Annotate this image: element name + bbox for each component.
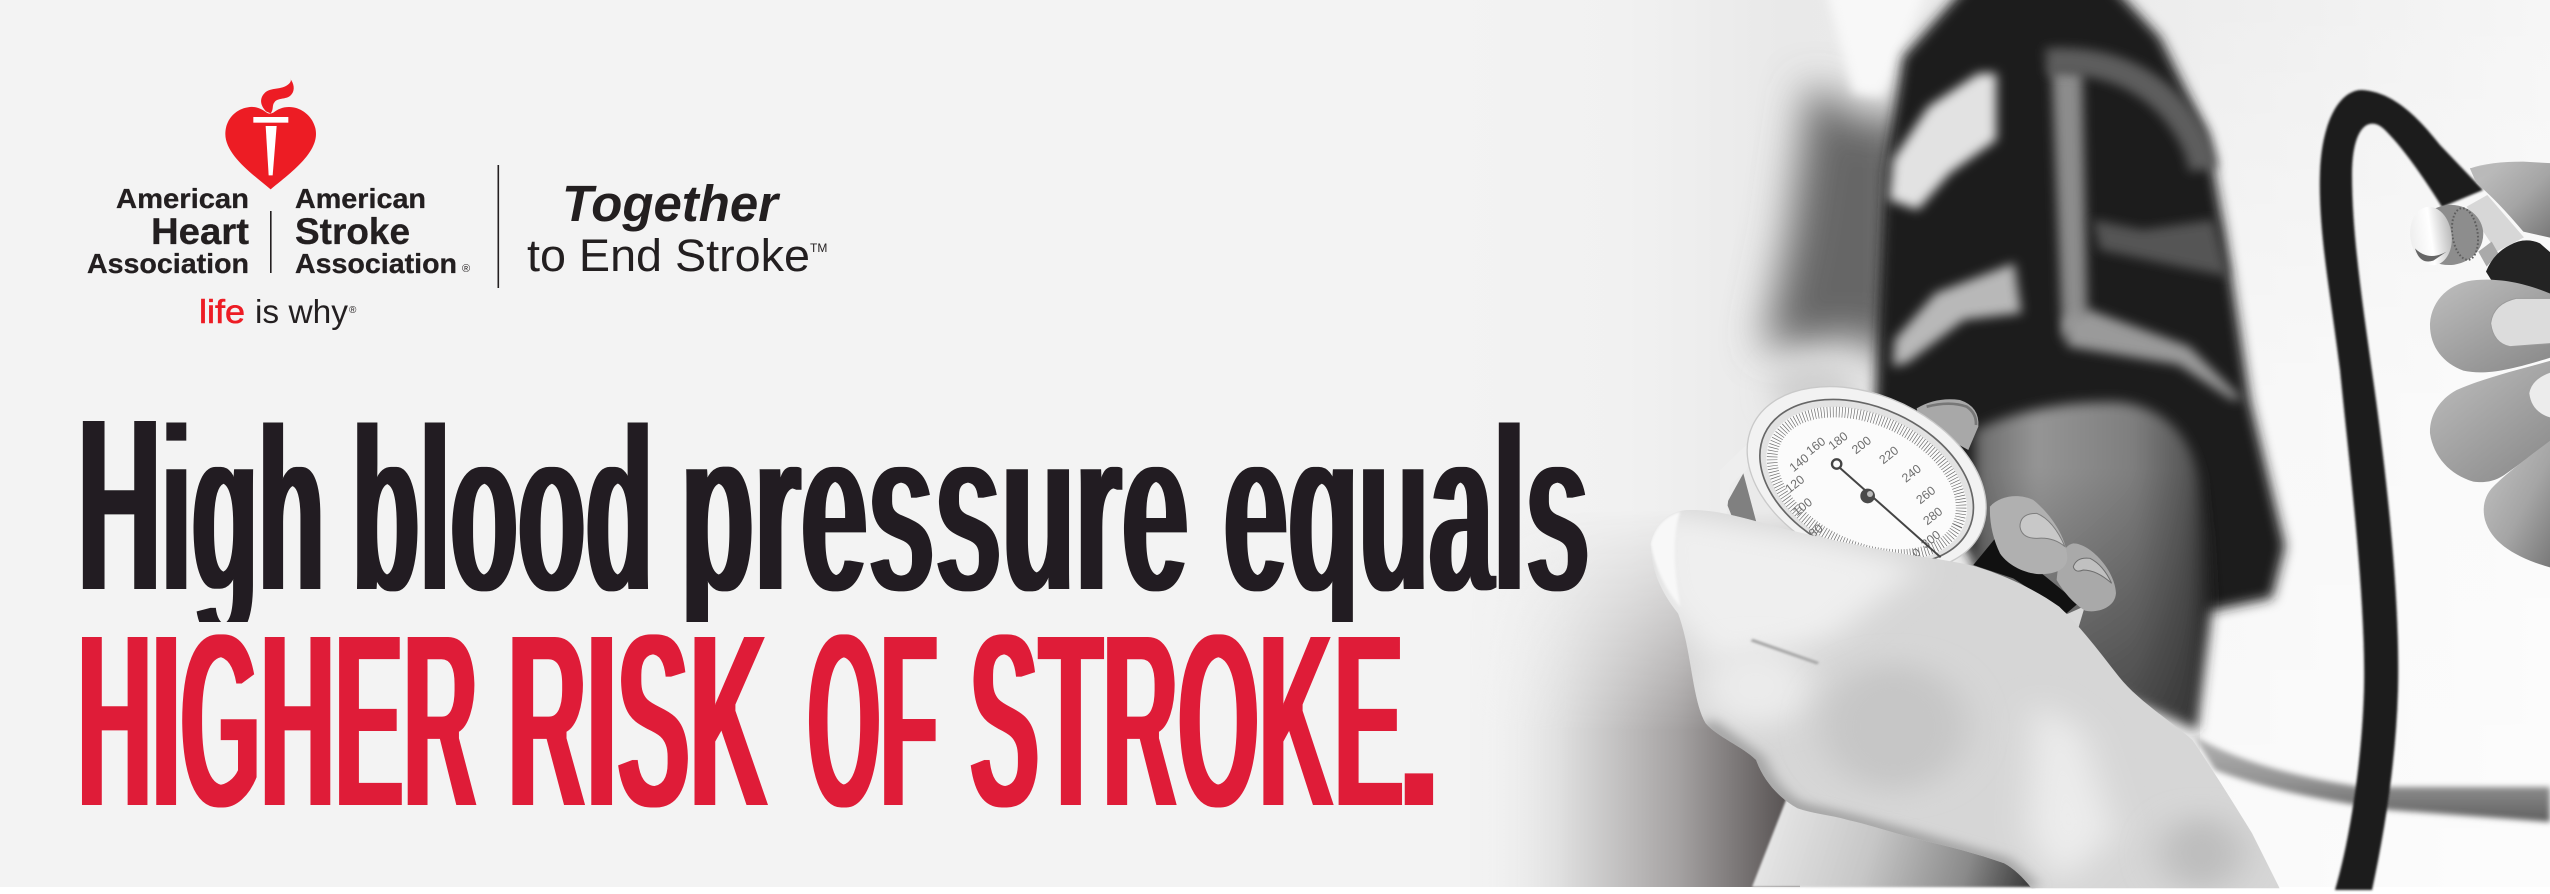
gauge strap: [1973, 537, 2085, 628]
gauge rim: [1717, 350, 2016, 608]
tagline: life is why: [199, 293, 357, 330]
gauge numbers: 80: [1806, 521, 1826, 541]
gauge numbers: 240: [1899, 462, 1924, 485]
knuckle crease: [1752, 640, 1818, 663]
cuff light patch: [1889, 73, 1996, 210]
headline line 2: .: [1396, 579, 1442, 862]
gauge numbers: 120: [1782, 472, 1807, 496]
middle fingernail: [2529, 372, 2550, 418]
index fingernail: [2491, 298, 2550, 347]
headline: [82, 421, 1588, 808]
American Heart Association wordmark: Heart: [151, 211, 249, 252]
gauge numbers: 200: [1849, 433, 1874, 457]
cuff vertical line: [2052, 67, 2087, 340]
icon: heart and torch: [225, 78, 316, 189]
light area over fingers: [1651, 510, 1912, 658]
gauge numbers: 140: [1787, 451, 1812, 475]
gauge numbers: 280: [1920, 504, 1945, 528]
forearm under cuff: [1975, 402, 2213, 730]
cuff strap markings: [1889, 61, 2243, 400]
valve knob: [2406, 201, 2487, 269]
gauge dial face: [1742, 377, 1992, 590]
logo small divider: [270, 211, 272, 273]
gauge ticks: [1749, 384, 1984, 583]
gauge numbers: [1782, 429, 1945, 560]
campaign lockup: Together to End Stroke: [527, 175, 827, 281]
American Stroke Association wordmark: American: [295, 183, 426, 214]
valve metal collar: [2467, 195, 2524, 252]
photo backdrop: [1450, 0, 2550, 887]
blood pressure cuff: [1875, 0, 2285, 610]
fingers gripping gauge: [1990, 496, 2116, 611]
tagline: life is why: ®: [349, 305, 357, 316]
American Heart Association wordmark: [87, 183, 249, 279]
gauge numbers: 260: [1913, 483, 1938, 507]
index finger: [2430, 280, 2550, 372]
valve stem: [2478, 242, 2498, 267]
American Stroke Association wordmark: ®: [462, 263, 470, 275]
gauge numbers: 180: [1826, 429, 1851, 453]
wrist right shade: [2160, 817, 2243, 890]
top finger: [2470, 162, 2550, 238]
tagline: life is why: life: [199, 293, 245, 330]
finger tip highlight: [1651, 512, 1680, 607]
gauge numbers: 160: [1803, 434, 1828, 458]
cuff body: [1875, 0, 2285, 610]
ring finger: [2057, 543, 2116, 611]
black hose grip: [2486, 240, 2550, 298]
headline line 2: HIGHER: [78, 579, 478, 862]
rubber tube: lower horizontal section: [2193, 735, 2550, 822]
headline line 1: blood: [352, 378, 653, 643]
right hand with valve: [2406, 162, 2550, 568]
headline line 1: High: [78, 363, 325, 646]
American Stroke Association wordmark: Association: [295, 248, 457, 279]
hand lower edge shade: [1706, 723, 2032, 888]
headline line 1: pressure: [681, 378, 1189, 643]
ring finger: [2484, 438, 2550, 568]
shirt shading: [1764, 0, 1928, 420]
cuff label smudge: [2093, 220, 2228, 276]
American Stroke Association wordmark: Stroke: [295, 211, 410, 252]
headline line 2: RISK: [508, 579, 769, 862]
hand mid shade: [1820, 663, 1967, 790]
lower knuckle light: [1701, 647, 1811, 727]
American Heart Association wordmark: American: [116, 183, 249, 214]
thumb behind gauge: [1917, 399, 1978, 450]
cuff upper curve: [2046, 61, 2203, 170]
pressure gauge: [1717, 350, 2016, 608]
logo: American Heart / American Stroke Association: [87, 78, 470, 330]
left shadow fade: [1528, 522, 1800, 887]
gauge numbers: 0: [1910, 545, 1924, 560]
tagline: life is why: is why: [255, 293, 349, 330]
gauge numbers: 220: [1876, 443, 1901, 467]
wrist ridge: [2027, 700, 2114, 887]
American Stroke Association wordmark: [295, 183, 470, 279]
campaign lockup: Together to End Stroke: Together: [562, 175, 781, 232]
middle finger: [2430, 360, 2550, 482]
headline: STROKE: [970, 579, 1404, 862]
rubber tube: black curved section: [2320, 90, 2483, 890]
cuff lower line: [2064, 310, 2243, 400]
cuff lower patch: [1893, 263, 2021, 366]
logo divider: [498, 165, 499, 288]
large hand holding gauge: [1651, 510, 2280, 888]
gauge numbers: 100: [1790, 495, 1815, 519]
text: equals: [1224, 378, 1590, 643]
campaign lockup: Together to End Stroke: TM: [810, 241, 827, 255]
gauge needle: [1832, 459, 1941, 557]
middle finger: [1990, 496, 2067, 574]
photo: hands using a blood pressure cuff and gauge: [1450, 0, 2550, 894]
headline line 2: OF: [808, 579, 938, 862]
lower arm: [1752, 795, 2035, 887]
gauge case wedge: [1720, 433, 1758, 523]
headline line 1: [82, 421, 1588, 622]
gauge inner ring: [1733, 367, 2000, 596]
gauge numbers: 300: [1918, 528, 1943, 551]
campaign lockup: Together to End Stroke: to End Stroke: [527, 230, 810, 281]
American Heart Association wordmark: Association: [87, 248, 249, 279]
